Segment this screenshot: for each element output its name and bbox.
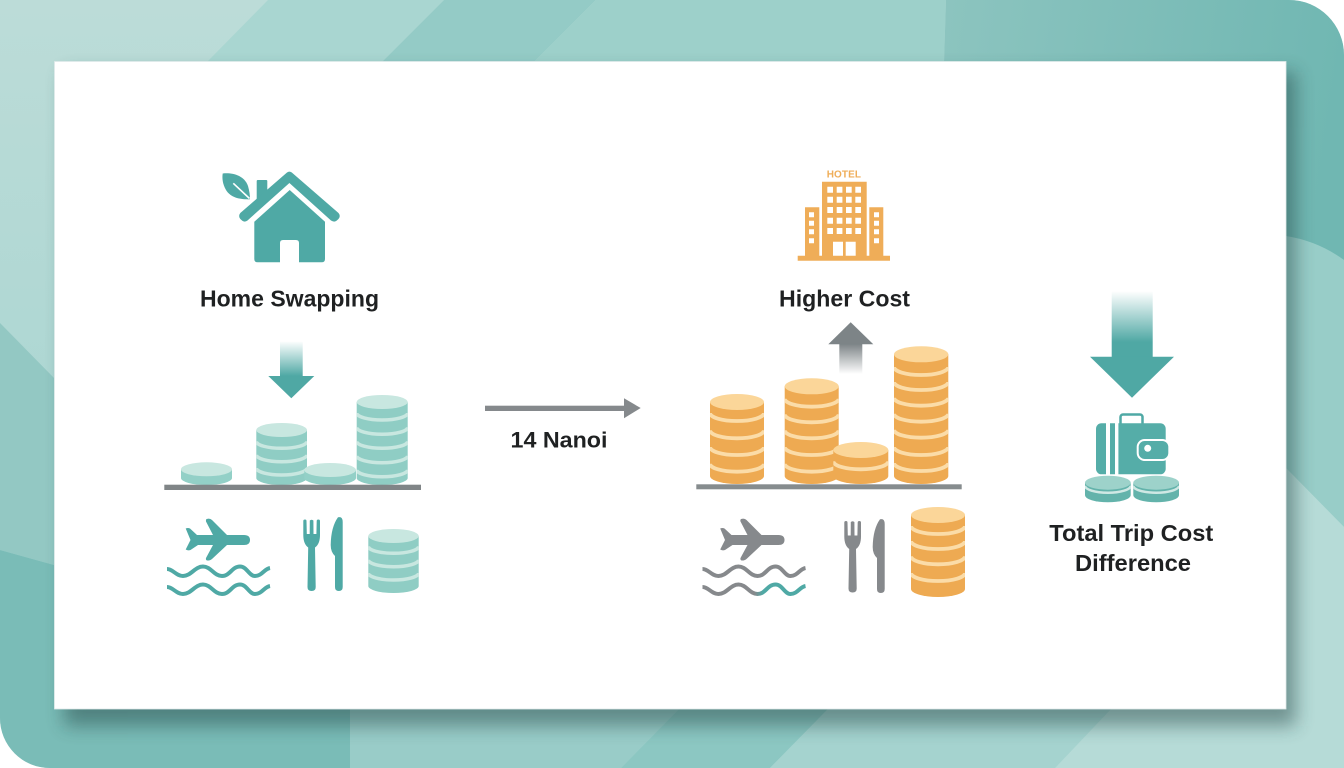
coin stack B (785, 378, 839, 484)
icon: coin stack, orange (911, 507, 965, 597)
white card (54, 62, 1286, 709)
chart: high cost coin stacks (696, 346, 962, 489)
arrow: 14 nights (485, 398, 641, 418)
icon: hotel (798, 170, 890, 261)
arrow: down to low costs (268, 342, 314, 398)
label: 14 Nanoi: 14 Nanoi (510, 428, 608, 452)
coin stack 1 (181, 462, 232, 485)
icon: fork and knife, grey (844, 519, 885, 593)
heading: Total Trip Cost Difference: Difference (1075, 550, 1191, 576)
icon: house with leaf (222, 172, 340, 262)
coin stack D (894, 346, 948, 484)
hotel sign: HOTEL (827, 170, 861, 180)
arrow: large down to savings (1090, 292, 1174, 398)
shelf line (696, 484, 962, 489)
shelf line (164, 485, 421, 490)
coin stack 4 (357, 395, 408, 485)
icon: fork and knife, teal (303, 517, 343, 591)
arrow: up, higher cost (828, 322, 873, 374)
icon: airplane over waves, grey (702, 519, 806, 594)
heading: Higher Cost: Higher Cost (779, 286, 910, 312)
icon: airplane over waves, teal (167, 519, 270, 594)
icon: wallet with coins (1085, 414, 1179, 502)
coin stack 3 (304, 463, 356, 485)
chart: low cost coin stacks (164, 395, 421, 490)
coin stack A (710, 394, 764, 484)
coin stack C (833, 442, 888, 484)
heading: Home Swapping: Home Swapping (200, 286, 379, 312)
hotel building (798, 182, 890, 261)
coin stack 2 (256, 423, 307, 485)
heading: Total Trip Cost Difference (1049, 520, 1214, 576)
heading: Total Trip Cost Difference: Total Trip Cost (1049, 520, 1214, 546)
icon: coin stack, teal (368, 529, 419, 593)
